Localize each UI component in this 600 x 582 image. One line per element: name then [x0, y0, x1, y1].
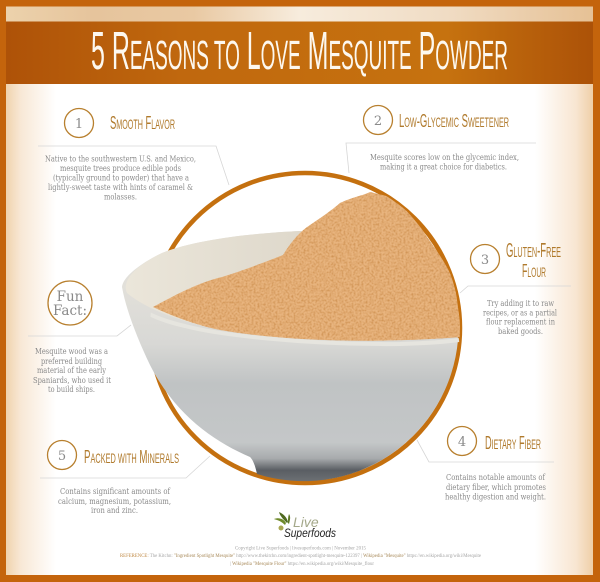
logo: Live Superfoods: Superfoods: [284, 526, 336, 540]
panel: 2 low-glycemic sweetener: [346, 106, 536, 173]
bowl of mesquite powder: [122, 192, 462, 481]
panel: 5 packed with minerals: iron and zinc.: [91, 506, 138, 515]
panel: fun fact: preferred building: [41, 357, 102, 366]
footer: references: | Wikipedia "Mesquite Flour" https://en.wikipedia.org/wiki/Mesquite_flour: [230, 562, 374, 567]
panel: 2 low-glycemic sweetener: making it a great choice for diabetics.: [380, 162, 507, 172]
panel: 4 dietary fiber: DIETARY FIBER: [485, 433, 541, 453]
title: 5 REASONS TO LOVE MESQUITE POWDER: [91, 21, 508, 81]
panel: 1 smooth flavor: SMOOTH FLAVOR: [110, 113, 175, 133]
panel: fun fact: Spaniards, who used it: [33, 376, 112, 385]
panel: fun fact: [28, 281, 131, 394]
panel: 5 packed with minerals: Contains significant amounts of: [60, 487, 171, 496]
panel: 3 gluten-free flour: [460, 240, 571, 336]
panel: 5 packed with minerals: PACKED WITH MINERALS: [84, 447, 179, 467]
panel: 3 gluten-free flour: GLUTEN-FREE: [506, 240, 561, 262]
panel: 4 dietary fiber: dietary fiber, which promotes: [446, 483, 546, 492]
footer: references: [120, 546, 482, 567]
decorative ring around bowl: [150, 173, 460, 483]
icon: leaves: [274, 512, 290, 530]
panel: 5 packed with minerals: calcium, magnesium, potassium,: [58, 497, 171, 506]
bowl interior: [126, 231, 458, 340]
panel: fun fact: Mesquite wood was a: [35, 347, 108, 356]
panel: 4 dietary fiber: [417, 426, 554, 502]
panel: 1 smooth flavor: Native to the southwestern U.S. and Mexico,: [45, 154, 196, 164]
panel: 3 gluten-free flour: flour replacement in: [486, 318, 555, 326]
panel: 1 smooth flavor: (typically ground to powder) that have a: [53, 174, 189, 182]
panel: 2 low-glycemic sweetener: LOW-GLYCEMIC SWEETENER: [399, 111, 509, 131]
panel: 2 low-glycemic sweetener: Mesquite scores low on the glycemic index,: [370, 153, 519, 162]
panel: 4 dietary fiber: Contains notable amounts of: [446, 473, 546, 482]
panel: 5 packed with minerals: [40, 440, 210, 515]
panel: 5 packed with minerals: 5: [58, 449, 66, 464]
panel: fun fact: Fact:: [53, 303, 87, 319]
panel: fun fact: material of the early: [37, 366, 106, 375]
footer: references: Copyright Live Superfoods | livesuperfoods.com | November 2015: [235, 546, 366, 552]
panel: 4 dietary fiber: healthy digestion and weight.: [445, 492, 546, 502]
panel: fun fact: Fun: [57, 289, 84, 305]
powder: [125, 192, 462, 344]
panel: 4 dietary fiber: 4: [458, 435, 466, 450]
panel: 1 smooth flavor: 1: [75, 117, 83, 132]
panel: 3 gluten-free flour: baked goods.: [498, 327, 543, 336]
panel: fun fact: to build ships.: [48, 385, 95, 394]
logo: Live Superfoods: [274, 512, 336, 540]
panel: 3 gluten-free flour: Try adding it to raw: [487, 299, 554, 308]
panel: 1 smooth flavor: lightly-sweet taste with hints of caramel &: [48, 183, 193, 192]
bowl front rim: [150, 313, 460, 346]
panel: 1 smooth flavor: molasses.: [104, 192, 137, 202]
panel: 3 gluten-free flour: FLOUR: [522, 261, 546, 281]
bowl body: [122, 231, 458, 481]
panel: 1 smooth flavor: [38, 108, 229, 202]
panel: 3 gluten-free flour: recipes, or as a partial: [483, 308, 557, 318]
panel: 2 low-glycemic sweetener: 2: [374, 114, 382, 129]
panel: 3 gluten-free flour: 3: [481, 253, 489, 268]
logo: Live Superfoods: Live: [293, 514, 319, 530]
panel: 1 smooth flavor: mesquite trees produce edible pods: [60, 164, 181, 173]
footer: references: REFERENCE: The Kitchn: "Ingredient Spotlight Mesquite" http://www.thekitchn.com/ingredient-spotlight-mesquite-122397 | Wikipedia "Mesquite" https://en.wikipedia.org/wiki/Mesquite: [120, 554, 482, 559]
